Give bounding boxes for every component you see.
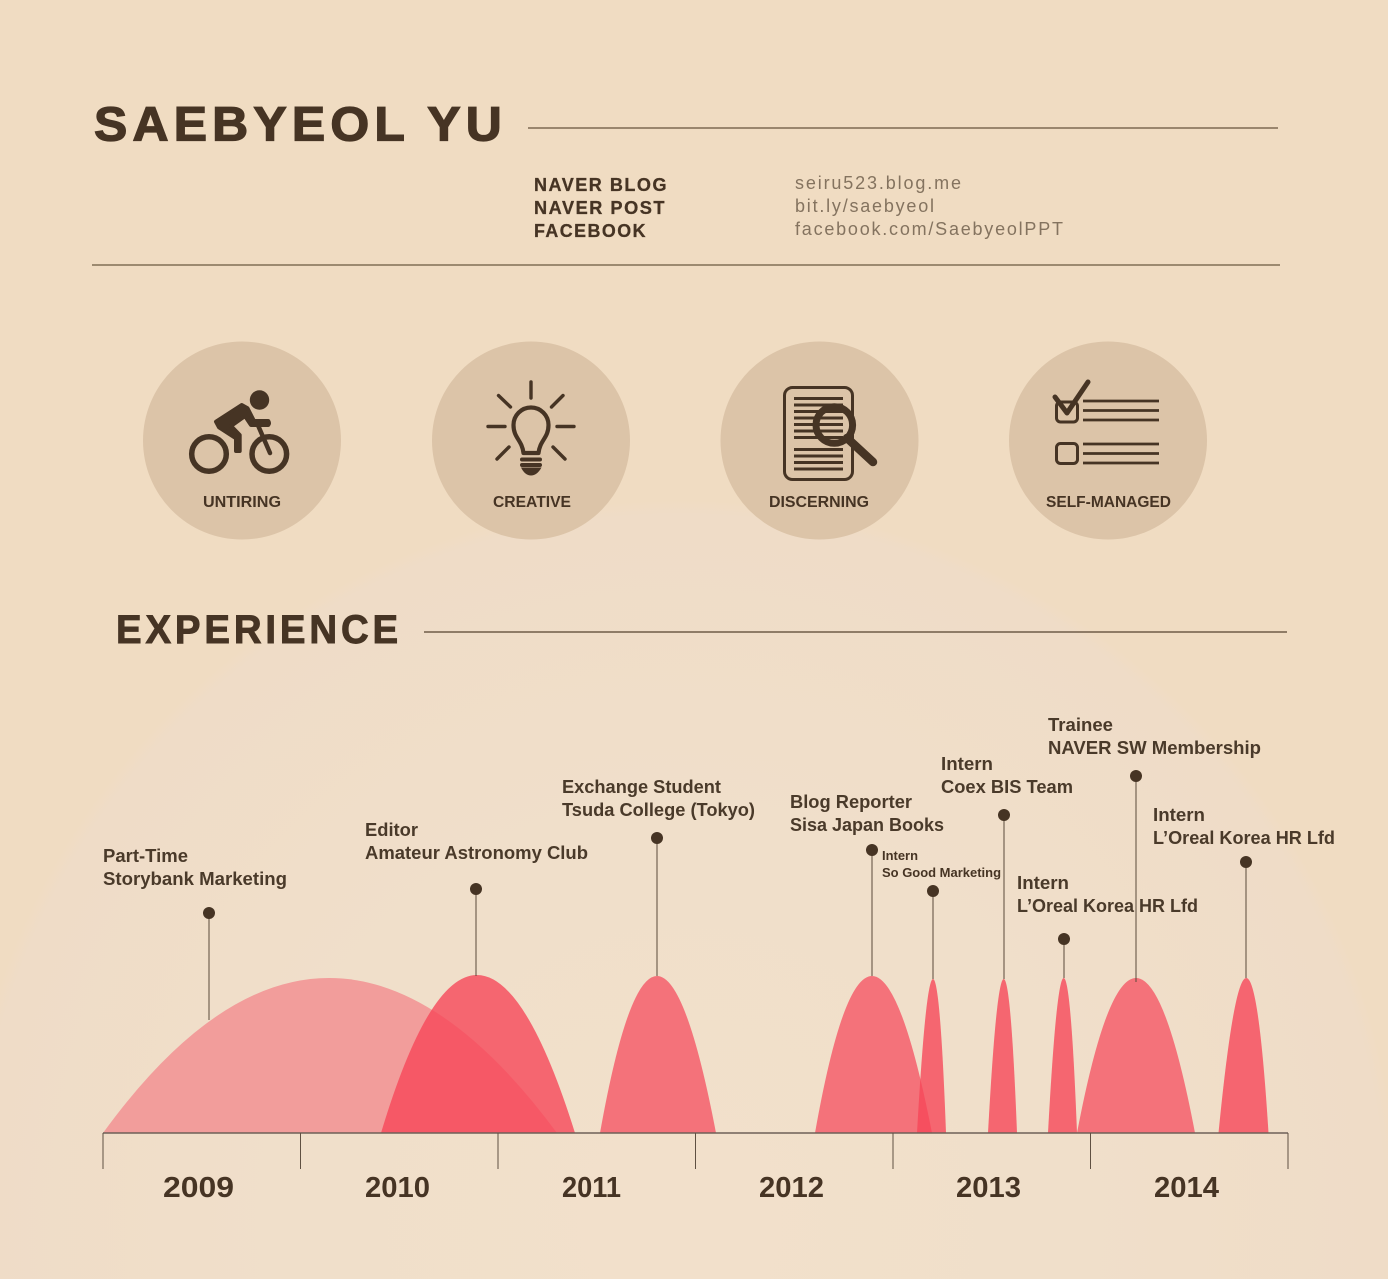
marker: Tsuda College: Exchange Student <box>562 777 721 797</box>
marker: L'Oreal Korea HR: L’Oreal Korea HR Lfd <box>1153 828 1335 848</box>
marker: Tsuda College: Tsuda College (Tokyo) <box>562 800 755 820</box>
year labels <box>163 1172 1219 1204</box>
year labels: 2013 <box>956 1172 1021 1204</box>
marker: So Good Marketing <box>882 848 1001 979</box>
marker: So Good Marketing: Intern <box>882 848 918 863</box>
trait: untiring: UNTIRING <box>203 494 281 511</box>
arc: L'Oreal Korea HR <box>1218 978 1268 1133</box>
contact labels <box>534 175 668 241</box>
year labels: 2012 <box>759 1172 824 1204</box>
icon: light bulb <box>488 382 574 476</box>
marker: L'Oreal Korea internship: Intern <box>1017 873 1069 893</box>
marker: L'Oreal Korea internship <box>1017 873 1198 978</box>
marker: L'Oreal Korea internship: L’Oreal Korea HR Lfd <box>1017 896 1198 916</box>
marker: Coex BIS Team: Intern <box>941 754 993 774</box>
contact labels: NAVER POST <box>534 198 666 218</box>
contact labels: NAVER BLOG <box>534 175 668 195</box>
contact links: bit.ly/saebyeol <box>795 196 934 216</box>
trait: untiring <box>143 342 341 540</box>
trait: discerning: DISCERNING <box>769 494 869 511</box>
timeline chart <box>103 715 1335 1204</box>
year labels: 2010 <box>365 1172 430 1204</box>
trait: creative <box>432 342 630 540</box>
contact links: seiru523.blog.me <box>795 173 961 193</box>
icon: cyclist <box>192 390 287 471</box>
marker: Amateur Astronomy Club: Amateur Astronomy Club <box>365 843 588 863</box>
icon: checklist <box>1055 382 1159 464</box>
marker: Coex BIS Team: Coex BIS Team <box>941 777 1073 797</box>
contact links: facebook.com/SaebyeolPPT <box>795 219 1063 239</box>
marker: Sisa Japan Books: Blog Reporter <box>790 792 912 812</box>
experience heading: EXPERIENCE <box>116 608 402 652</box>
marker: Sisa Japan Books <box>790 792 944 976</box>
arc: Amateur Astronomy Club <box>381 975 575 1133</box>
trait: self-managed: SELF-MANAGED <box>1046 494 1171 511</box>
marker: Storybank Marketing: Storybank Marketing <box>103 869 287 889</box>
arc: Tsuda College <box>600 976 716 1133</box>
trait: creative: CREATIVE <box>493 494 571 511</box>
marker: Amateur Astronomy Club <box>365 820 588 976</box>
trait: self-managed <box>1009 342 1207 540</box>
marker: Coex BIS Team <box>941 754 1073 979</box>
year labels: 2011 <box>562 1172 621 1204</box>
arc: NAVER SW Membership <box>1077 978 1195 1133</box>
year labels: 2009 <box>163 1172 234 1204</box>
contact links <box>795 173 1063 239</box>
marker: Sisa Japan Books: Sisa Japan Books <box>790 815 944 835</box>
marker: NAVER SW Membership: Trainee <box>1048 715 1113 735</box>
arc: Storybank Marketing <box>103 978 557 1133</box>
title: SAEBYEOL YU <box>94 98 507 152</box>
arc: Sisa Japan Books <box>815 976 932 1133</box>
trait: discerning <box>720 342 918 540</box>
marker: Tsuda College <box>562 777 755 976</box>
arc: So Good Marketing <box>917 979 946 1133</box>
marker: NAVER SW Membership <box>1048 715 1261 982</box>
icon: document with magnifier <box>784 388 873 480</box>
marker: NAVER SW Membership: NAVER SW Membership <box>1048 738 1261 758</box>
arc: L'Oreal Korea internship <box>1048 978 1077 1133</box>
marker: Amateur Astronomy Club: Editor <box>365 820 418 840</box>
marker: L'Oreal Korea HR: Intern <box>1153 805 1205 825</box>
year labels: 2014 <box>1154 1172 1219 1204</box>
arc: Coex BIS Team <box>988 979 1017 1133</box>
time axis <box>103 1133 1288 1169</box>
marker: So Good Marketing: So Good Marketing <box>882 865 1001 880</box>
contact labels: FACEBOOK <box>534 221 647 241</box>
marker: L'Oreal Korea HR <box>1153 805 1335 978</box>
marker: Storybank Marketing <box>103 846 287 1020</box>
marker: Storybank Marketing: Part-Time <box>103 846 188 866</box>
